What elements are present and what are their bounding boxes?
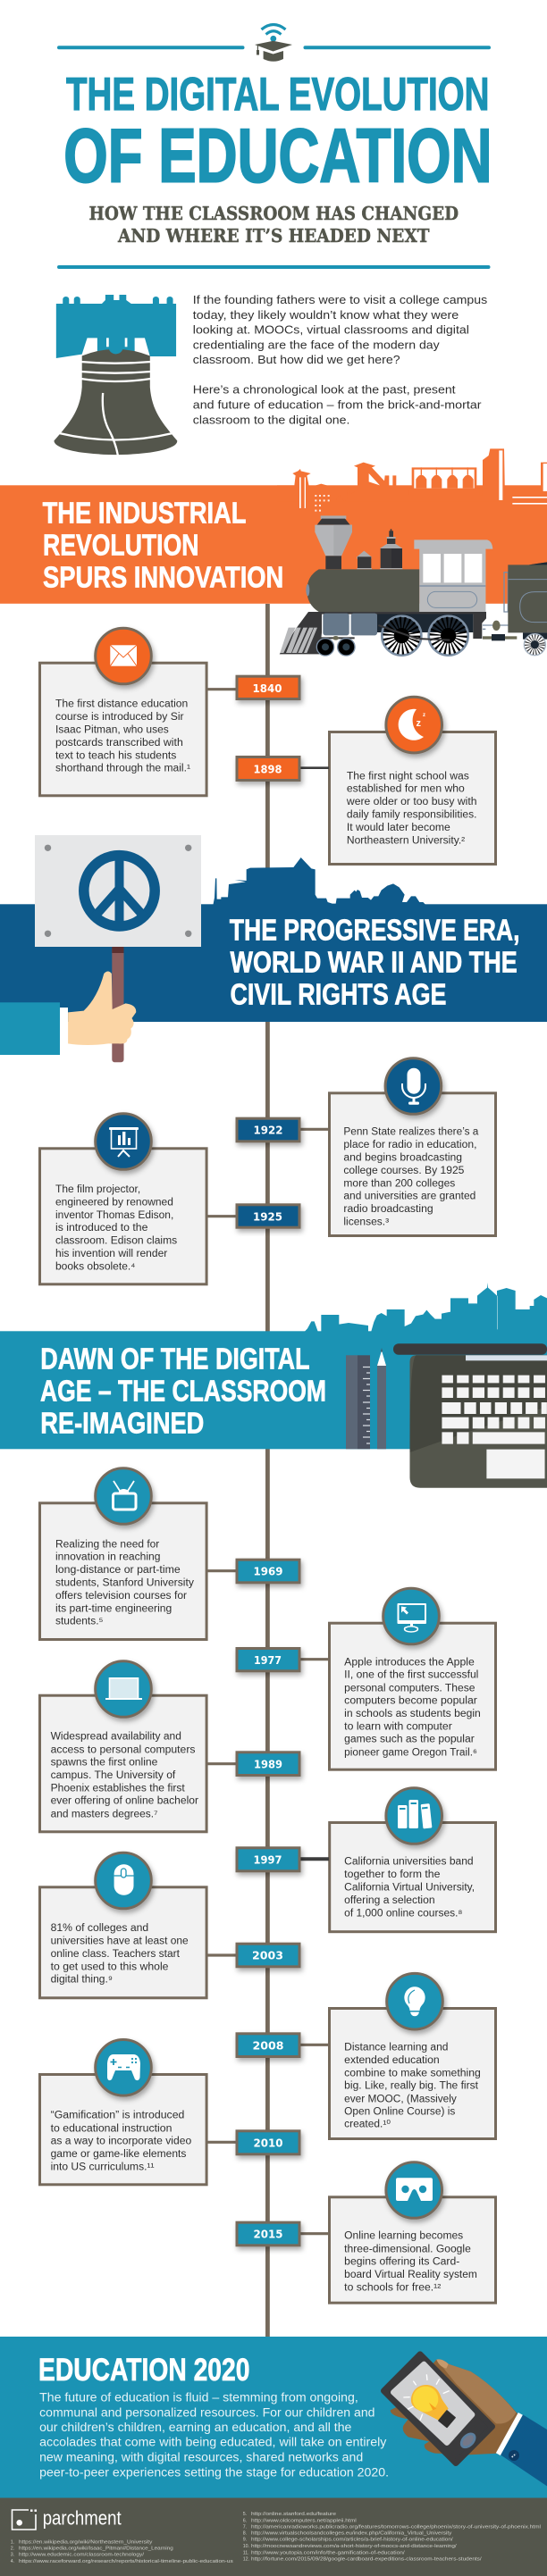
illustration: ruler, pencil and laptop: [346, 1343, 547, 1488]
year 1922: [237, 1118, 299, 1142]
event 2008: first MOOC: big. Like, really big. The first: [344, 2081, 479, 2092]
event 1925: film projector: engineered by renowned: [55, 1197, 173, 1208]
references 5 to 12: http://moocnewsandreviews.com/a-short-history-of-moocs-and-distance-learning/: [251, 2544, 457, 2549]
year 1977: [237, 1649, 299, 1671]
illustration: hand holding peace sign: [0, 835, 201, 1062]
event 2003: online classes: universities have at least one: [51, 1936, 189, 1947]
event 1898: night school: were older or too busy with: [346, 797, 477, 807]
references 5 to 12: http://www.virtualschoolsandcolleges.eu/index.php/California_Virtual_University: [251, 2530, 452, 2536]
event 1989: first online campus: spawns the first online: [51, 1758, 157, 1769]
event 1969: television courses: students.⁵: [55, 1617, 104, 1627]
icon: mouse: [96, 1853, 151, 1909]
year 2010: 2010: [254, 2136, 283, 2149]
event 1922: radio: radio broadcasting: [343, 1204, 433, 1215]
intro text: looking at. MOOCs, virtual classrooms and digital: [193, 323, 469, 336]
event 2008: first MOOC: created.¹⁰: [344, 2120, 391, 2130]
event 1969: television courses: offers television courses for: [55, 1591, 187, 1602]
event 2015: cardboard VR: to schools for free.¹²: [344, 2282, 441, 2293]
timeline spine: [265, 604, 270, 2338]
references 5 to 12: 12.: [243, 2557, 249, 2563]
event 1989: first online campus: Widespread availability and: [51, 1732, 181, 1743]
event 2003: online classes: [39, 1853, 236, 1998]
event 2008: first MOOC: extended education: [344, 2055, 440, 2066]
illustration: steam locomotive: [280, 515, 547, 656]
icon: projector screen: [96, 1114, 151, 1169]
event 2008: first MOOC: Distance learning and: [344, 2043, 449, 2053]
title: [63, 69, 492, 199]
event 1997: California Virtual University: offering a selection: [344, 1895, 435, 1906]
event 2015: cardboard VR: three-dimensional. Google: [344, 2244, 471, 2254]
event 1898: night school: daily family responsibilities.: [347, 810, 477, 821]
references 5 to 12: 11.: [243, 2550, 249, 2555]
icon: light bulb: [387, 1973, 442, 2029]
subtitle: AND WHERE IT’S HEADED NEXT: [117, 225, 430, 247]
icon: books: [386, 1788, 442, 1844]
event 2015: cardboard VR: Online learning becomes: [344, 2231, 463, 2242]
event 1922: radio: and universities are granted: [343, 1192, 475, 1202]
icon: liberty bell: [54, 295, 177, 456]
event 1977: Apple II: to learn with computer: [344, 1721, 452, 1732]
year 1840: [237, 676, 299, 698]
event 2003: online classes: digital thing.⁹: [51, 1975, 113, 1986]
panel: education 2020: The future of education is fluid – stemming from ongoing,: [39, 2390, 358, 2404]
event 2010: gamification: “Gamification” is introduced: [51, 2111, 184, 2121]
year 2003: [237, 1944, 299, 1967]
year 1898: [237, 757, 299, 781]
event 2015: cardboard VR: board Virtual Reality system: [344, 2270, 477, 2280]
panel: education 2020: EDUCATION 2020: [38, 2353, 249, 2388]
year 2015: 2015: [254, 2228, 282, 2241]
year 1989: [237, 1752, 299, 1776]
event 1840: distance education: Isaac Pitman, who uses: [55, 724, 169, 735]
panel: education 2020: peer-to-peer experiences setting the stage for education 2020.: [39, 2465, 389, 2479]
event 2010: gamification: into US curriculums.¹¹: [51, 2162, 155, 2172]
intro text: today, they likely wouldn’t know what they were: [193, 308, 459, 322]
event 1969: television courses: its part-time engineering: [55, 1603, 172, 1614]
event 2010: gamification: [39, 2040, 236, 2185]
event 1922: radio: and begins broadcasting: [343, 1152, 462, 1163]
header: wifi graduation cap icon and rules: [57, 25, 491, 62]
year 1969: 1969: [254, 1565, 282, 1578]
event 1969: television courses: innovation in reaching: [55, 1552, 161, 1563]
panel: dawn of the digital age banner: [0, 1283, 547, 1449]
year 1925: 1925: [253, 1209, 282, 1223]
panel: education 2020: new meaning, with digital resources, shared networks and: [39, 2451, 363, 2464]
event 1925: film projector: classroom. Edison claims: [55, 1236, 177, 1247]
event 1898: night school: Northeastern University.²: [347, 835, 465, 846]
event 1997: California Virtual University: together to form the: [344, 1869, 440, 1880]
intro text: Here’s a chronological look at the past, present: [193, 383, 456, 397]
year 1898: 1898: [254, 762, 282, 775]
event 1898: night school: The first night school was: [347, 771, 469, 782]
event 1925: film projector: is introduced to the: [55, 1223, 147, 1234]
event 1898: night school: It would later become: [347, 823, 450, 833]
year 1969: [237, 1560, 299, 1583]
event 1977: Apple II: in schools as students begin: [344, 1709, 481, 1719]
subtitle: [57, 203, 490, 269]
event 2008: first MOOC: combine to make something: [344, 2068, 481, 2078]
references 5 to 12: http://online.stanford.edu/feature: [251, 2512, 336, 2517]
event 1840: distance education: course is introduced by Sir: [55, 712, 184, 723]
event 1989: first online campus: campus. The University of: [51, 1770, 176, 1781]
panel: education 2020: [0, 2337, 547, 2498]
logo: parchment: parchment: [43, 2507, 122, 2530]
year 2015: [237, 2222, 299, 2246]
logo: parchment: [13, 2507, 122, 2530]
subtitle: HOW THE CLASSROOM HAS CHANGED: [89, 203, 459, 224]
icon: desktop monitor: [383, 1588, 439, 1644]
event 1840: distance education: The first distance education: [55, 699, 188, 710]
references 5 to 12: http://www.oldcomputers.net/appleii.html: [251, 2518, 357, 2523]
event 1989: first online campus: access to personal computers: [51, 1744, 196, 1755]
icon: laptop: [96, 1661, 151, 1717]
panel: education 2020: communal and personalized resources. For our children and: [39, 2405, 374, 2419]
references 1 to 4: https://www.raceforward.org/research/reports/historical-timeline-public-education-us: [19, 2559, 233, 2564]
event 1977: Apple II: pioneer game Oregon Trail.⁶: [344, 1747, 477, 1758]
event 1922: radio: place for radio in education,: [343, 1140, 477, 1150]
event 2010: gamification: to educational instruction: [51, 2123, 172, 2134]
icon: crescent moon: z: [417, 718, 422, 729]
event 1840: distance education: postcards transcribed with: [55, 738, 183, 749]
intro text: [193, 293, 488, 426]
event 1840: distance education: shorthand through the mail.¹: [55, 764, 190, 774]
event 2008: first MOOC: [300, 1973, 495, 2138]
references 5 to 12: 5.: [243, 2512, 247, 2517]
references 5 to 12: http://americanradioworks.publicradio.org/features/tomorrows-college/phoenix/story-of-university-of-phoenix.html: [251, 2524, 541, 2530]
event 1997: California Virtual University: [300, 1788, 495, 1932]
event 2010: gamification: game or game-like elements: [51, 2149, 187, 2160]
year 2008: [237, 2034, 299, 2056]
year 1989: 1989: [254, 1757, 282, 1770]
panel: education 2020: our children’s children, earning an education, and all the: [39, 2421, 351, 2434]
event 2015: cardboard VR: begins offering its Card-: [344, 2257, 459, 2268]
event 1898: night school: established for men who: [347, 784, 465, 795]
event 1898: night school: [300, 697, 495, 865]
icon: television: [96, 1468, 151, 1524]
event 2003: online classes: online class. Teachers start: [51, 1949, 181, 1960]
event 1922: radio: Penn State realizes there’s a: [343, 1127, 479, 1138]
event 1969: television courses: long-distance or part-time: [55, 1565, 181, 1576]
event 2008: first MOOC: ever MOOC, (Massively: [344, 2094, 457, 2104]
icon: envelope: [96, 628, 151, 684]
event 1922: radio: college courses. By 1925: [343, 1166, 464, 1176]
event 1997: California Virtual University: California universities band: [344, 1857, 474, 1868]
event 1977: Apple II: Apple introduces the Apple: [344, 1657, 475, 1668]
event 1989: first online campus: [39, 1661, 236, 1832]
references 1 to 4: 2.: [11, 2546, 14, 2551]
event 2003: online classes: 81% of colleges and: [51, 1923, 148, 1934]
event 1977: Apple II: II, one of the first successful: [344, 1670, 478, 1681]
event 1977: Apple II: computers become popular: [344, 1696, 477, 1707]
panel: dawn of the digital age banner: DAWN OF THE DIGITAL: [40, 1342, 310, 1376]
year 1997: [237, 1848, 299, 1871]
event 1977: Apple II: games such as the popular: [344, 1735, 475, 1745]
illustration: hand holding smartphone: [383, 2354, 547, 2486]
references 5 to 12: 7.: [243, 2524, 247, 2530]
year 1840: 1840: [252, 682, 282, 695]
event 1925: film projector: inventor Thomas Edison,: [55, 1210, 173, 1221]
event 1840: distance education: text to teach his students: [55, 750, 177, 761]
intro text: classroom to the digital one.: [193, 413, 349, 426]
footer: [0, 2497, 547, 2576]
year 1922: 1922: [254, 1124, 282, 1137]
event 1925: film projector: books obsolete.⁴: [55, 1261, 135, 1272]
year 1997: 1997: [254, 1853, 282, 1866]
panel: progressive era banner: CIVIL RIGHTS AGE: [231, 979, 447, 1012]
panel: industrial revolution banner: [0, 448, 547, 604]
references 1 to 4: http://www.edudemic.com/classroom-technology/: [19, 2553, 145, 2558]
event 2008: first MOOC: Open Online Course) is: [344, 2106, 456, 2117]
event 1922: radio: [300, 1058, 495, 1236]
event 2010: gamification: as a way to incorporate video: [51, 2137, 191, 2147]
references 1 to 4: https://en.wikipedia.org/wiki/Northeastern_University: [19, 2539, 153, 2545]
references 5 to 12: 9.: [243, 2538, 247, 2543]
panel: dawn of the digital age banner: AGE – THE CLASSROOM: [40, 1375, 326, 1408]
event 2015: cardboard VR: [300, 2162, 495, 2303]
references 5 to 12: http://fortune.com/2015/09/28/google-cardboard-expeditions-classroom-teachers-students/: [251, 2557, 482, 2563]
intro text: If the founding fathers were to visit a college campus: [193, 293, 488, 306]
event 1989: first online campus: Phoenix establishes the first: [51, 1783, 186, 1794]
intro text: credentialing are the face of the modern day: [193, 338, 440, 351]
event 1840: distance education: [39, 628, 236, 796]
event 1922: radio: licenses.³: [343, 1217, 389, 1228]
references 5 to 12: http://www.youtopia.com/info/the-gamification-of-education/: [251, 2550, 405, 2555]
event 1997: California Virtual University: of 1,000 online courses.⁸: [344, 1908, 463, 1919]
event 1925: film projector: [39, 1114, 236, 1284]
event 1969: television courses: Realizing the need for: [55, 1539, 159, 1550]
icon: crescent moon: [386, 697, 442, 753]
panel: dawn of the digital age banner: RE-IMAGINED: [40, 1407, 204, 1440]
event 1925: film projector: his invention will render: [55, 1249, 167, 1259]
references 5 to 12: [243, 2512, 541, 2563]
references 5 to 12: 10.: [243, 2544, 249, 2549]
event 2003: online classes: to get used to this whole: [51, 1961, 168, 1972]
event 1925: film projector: The film projector,: [55, 1184, 140, 1195]
intro text: classroom. But how did we get here?: [193, 353, 400, 366]
icon: game controller: [96, 2040, 151, 2095]
event 1977: Apple II: [300, 1588, 495, 1769]
panel: education 2020: accolades that come with being educated, will take on entirely: [39, 2436, 387, 2449]
panel: industrial revolution banner: SPURS INNOVATION: [43, 562, 283, 595]
event 1969: television courses: students, Stanford University: [55, 1577, 194, 1588]
event 1922: radio: more than 200 colleges: [343, 1178, 456, 1189]
references 1 to 4: https://en.wikipedia.org/wiki/Isaac_Pitman#Distance_Learning: [19, 2546, 173, 2551]
year 2010: [237, 2131, 299, 2154]
panel: progressive era banner: [0, 857, 547, 1022]
references 5 to 12: http://www.college-scholarships.com/articles/a-brief-history-of-online-education/: [251, 2538, 453, 2543]
panel: industrial revolution banner: REVOLUTION: [43, 530, 198, 563]
year 2008: 2008: [252, 2038, 284, 2052]
references 1 to 4: 4.: [11, 2559, 14, 2564]
year 2003: 2003: [252, 1949, 283, 1962]
references 5 to 12: 6.: [243, 2518, 247, 2523]
references 1 to 4: 3.: [11, 2553, 14, 2558]
year 1977: 1977: [254, 1653, 282, 1667]
icon: microphone: [385, 1058, 442, 1114]
event 1989: first online campus: ever offering of online bachelor: [51, 1796, 198, 1807]
year 1925: [237, 1205, 299, 1227]
panel: industrial revolution banner: THE INDUSTRIAL: [43, 497, 246, 531]
event 1969: television courses: [39, 1468, 236, 1640]
references 5 to 12: 8.: [243, 2530, 247, 2536]
references 1 to 4: 1.: [11, 2539, 14, 2545]
event 1977: Apple II: personal computers. These: [344, 1683, 475, 1694]
intro text: and future of education – from the brick-and-mortar: [193, 398, 482, 411]
event 1997: California Virtual University: California Virtual University,: [344, 1882, 475, 1893]
icon: VR headset: [386, 2162, 442, 2218]
references 1 to 4: [11, 2539, 233, 2564]
event 1989: first online campus: and masters degrees.⁷: [51, 1809, 157, 1819]
icon: crescent moon: z: [423, 713, 425, 718]
